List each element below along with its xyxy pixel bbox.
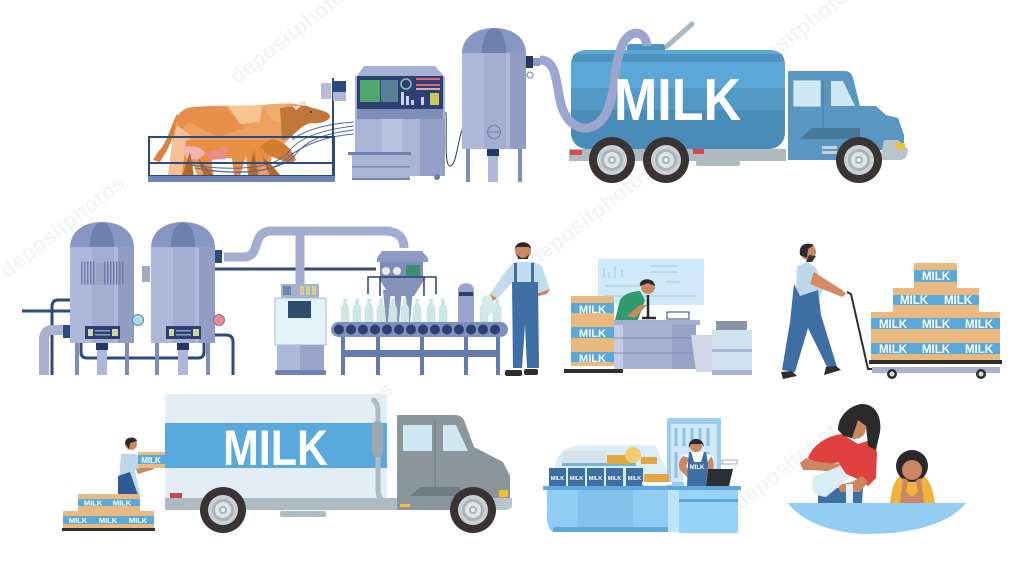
delivery worker and boxes: MILK <box>113 498 132 508</box>
pallet cart with boxes: MILK <box>879 344 908 356</box>
milk box stack <box>564 296 623 373</box>
text: depositphotos <box>263 376 398 489</box>
milk box stack: MILK <box>579 353 606 365</box>
storage tank <box>462 28 540 182</box>
pallet cart with boxes: MILK <box>879 319 908 331</box>
pallet cart with boxes: MILK <box>965 344 994 356</box>
cartons: MILK <box>628 476 641 482</box>
fence <box>149 78 334 176</box>
mother and child <box>788 404 966 534</box>
small cow <box>182 139 296 176</box>
tank labels <box>85 326 201 339</box>
cartons: MILK <box>589 476 602 482</box>
milking hoses <box>190 122 354 172</box>
pallet cart with boxes: MILK <box>944 295 973 307</box>
tanker truck <box>540 24 908 183</box>
cab <box>788 71 908 160</box>
display case <box>555 445 667 486</box>
milk box stack: MILK <box>579 328 606 340</box>
step box <box>348 152 411 180</box>
bottling machine <box>368 251 436 322</box>
delivery worker and boxes: MILK <box>129 516 148 525</box>
test tubes <box>667 312 689 319</box>
store counter <box>543 418 741 533</box>
cartons: MILK <box>608 476 621 482</box>
big cow <box>153 100 330 176</box>
cargo box <box>165 394 387 498</box>
mother <box>800 404 880 503</box>
pallet cart with boxes <box>847 263 1002 379</box>
pallet cart with boxes: MILK <box>922 319 951 331</box>
MILK lettering: MILK <box>223 420 328 476</box>
scientist <box>615 279 656 320</box>
text: depositphotos <box>523 159 658 272</box>
gauges <box>132 266 224 326</box>
lab wall screen <box>598 259 704 305</box>
lab scene <box>564 259 752 375</box>
chassis <box>569 149 786 166</box>
conveyor <box>331 322 508 375</box>
text: depositphotos <box>728 402 863 515</box>
cartons <box>549 468 672 486</box>
cartons: MILK <box>570 476 583 482</box>
pallet cart with boxes: MILK <box>900 295 929 307</box>
shopkeeper: MILK <box>690 465 705 471</box>
milking machine <box>348 66 462 180</box>
delivery worker and boxes: MILK <box>69 516 88 525</box>
grey cab <box>397 415 512 510</box>
child <box>890 450 935 503</box>
hatch and lid <box>627 24 692 52</box>
delivery worker and boxes <box>62 437 165 531</box>
MILK tanker lettering: MILK <box>614 67 741 133</box>
factory worker <box>481 242 550 376</box>
counter <box>543 486 741 533</box>
register <box>706 460 737 486</box>
control unit <box>275 284 326 375</box>
tank body <box>571 50 785 149</box>
cartons: MILK <box>551 476 564 482</box>
chassis <box>165 493 397 517</box>
cart worker <box>781 244 846 379</box>
cows in milking stall <box>148 78 354 182</box>
process pipe <box>215 231 404 285</box>
bottles <box>341 299 501 322</box>
storage tanks pair <box>22 222 404 375</box>
milk box stack: MILK <box>579 304 606 316</box>
pallet cart with boxes: MILK <box>922 344 951 356</box>
pallet cart with boxes: MILK <box>965 319 994 331</box>
stall control box <box>321 81 346 101</box>
truck wheels <box>589 137 882 183</box>
shopkeeper <box>679 439 714 486</box>
delivery truck <box>165 394 512 533</box>
fridge <box>667 418 721 486</box>
delivery worker and boxes: MILK <box>84 498 103 508</box>
hose <box>540 33 647 128</box>
lab bench <box>614 320 700 369</box>
pallet cart with boxes: MILK <box>922 271 951 283</box>
pipes <box>22 300 233 375</box>
bowl shaped table <box>788 503 966 534</box>
delivery worker and boxes: MILK <box>99 516 118 525</box>
wheels <box>200 487 496 533</box>
vent grille <box>81 263 124 285</box>
sealing unit <box>458 283 474 322</box>
delivery worker and boxes: MILK <box>141 456 161 465</box>
exhaust <box>372 399 392 505</box>
bins and rack <box>691 321 752 375</box>
